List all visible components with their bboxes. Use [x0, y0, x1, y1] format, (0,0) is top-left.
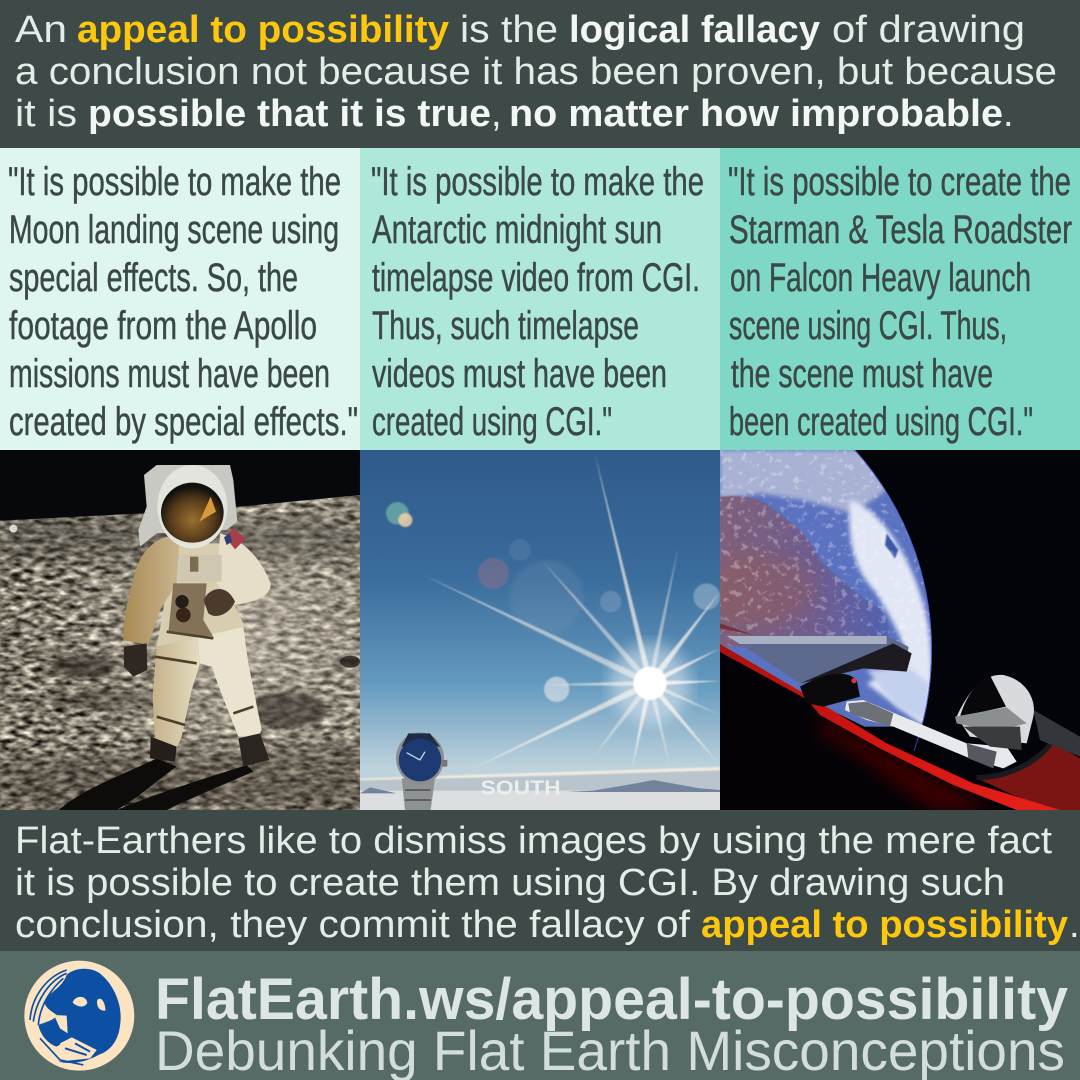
quote text 1: special effects. So, the	[9, 256, 298, 300]
header line 3: no matter how improbable	[509, 93, 1003, 135]
Roadster body	[720, 623, 1080, 810]
panel: quote Starman	[720, 148, 1080, 450]
conclusion line 2: it is possible to create them using CGI. By drawing such	[15, 862, 1005, 904]
quote text 2: "It is possible to make the	[371, 160, 704, 204]
Earth	[720, 450, 932, 751]
header line 3: .	[1003, 93, 1014, 135]
logo: flat Earth globe	[24, 961, 134, 1071]
site URL: FlatEarth.ws/appeal-to-possibility	[155, 967, 1068, 1032]
conclusion line 3: .	[1069, 904, 1080, 946]
header line 3: ,	[491, 93, 502, 135]
quote text 1	[8, 160, 358, 444]
conclusion line 3: conclusion, they commit the fallacy of	[15, 904, 690, 946]
quote text 2: timelapse video from CGI.	[372, 256, 700, 300]
header line 1	[15, 9, 1025, 51]
header line 1: logical fallacy	[569, 9, 820, 51]
quote text 2: created using CGI."	[372, 400, 612, 444]
quote text 2: Thus, such timelapse	[372, 304, 639, 348]
image: Starman in Tesla Roadster above Earth	[720, 450, 1080, 810]
panel: quote midnight sun	[360, 148, 720, 450]
panel: conclusion	[0, 810, 1080, 951]
panel: quote moon landing	[0, 148, 360, 450]
header line 1: of drawing	[832, 9, 1025, 51]
label SOUTH: SOUTH	[481, 777, 561, 800]
header line 1: appeal to possibility	[77, 9, 449, 51]
conclusion line 1: Flat-Earthers like to dismiss images by using the mere fact	[15, 820, 1052, 862]
image: Antarctic midnight sun	[360, 450, 1052, 810]
panel: header	[0, 0, 1080, 148]
quote text 2	[371, 160, 704, 444]
header line 3: it is	[15, 93, 77, 135]
sun rays	[423, 452, 720, 770]
image: astronaut on the Moon	[0, 450, 360, 810]
header line 3	[15, 93, 1014, 135]
conclusion line 3	[15, 904, 1080, 946]
conclusion line 3: appeal to possibility	[701, 904, 1068, 946]
lens flares	[386, 502, 720, 702]
header line 3: possible that it is true	[88, 93, 491, 135]
quote text 2: Antarctic midnight sun	[372, 208, 662, 252]
Starman	[845, 675, 1080, 768]
header line 1: is the	[460, 9, 558, 51]
astronaut	[58, 465, 271, 810]
header line 2: a conclusion not because it has been proven, but because	[15, 51, 1057, 93]
quote text 1: footage from the Apollo	[9, 304, 317, 348]
quote text 1: "It is possible to make the	[8, 160, 341, 204]
quote text 1: Moon landing scene using	[9, 208, 339, 252]
header line 1: An	[15, 9, 67, 51]
panel: footer	[0, 951, 1080, 1080]
wristwatch	[396, 732, 447, 810]
quote text 3	[728, 160, 1072, 444]
quote text 2: videos must have been	[372, 352, 667, 396]
quote text 1: missions must have been	[9, 352, 330, 396]
quote text 1: created by special effects."	[9, 400, 358, 444]
